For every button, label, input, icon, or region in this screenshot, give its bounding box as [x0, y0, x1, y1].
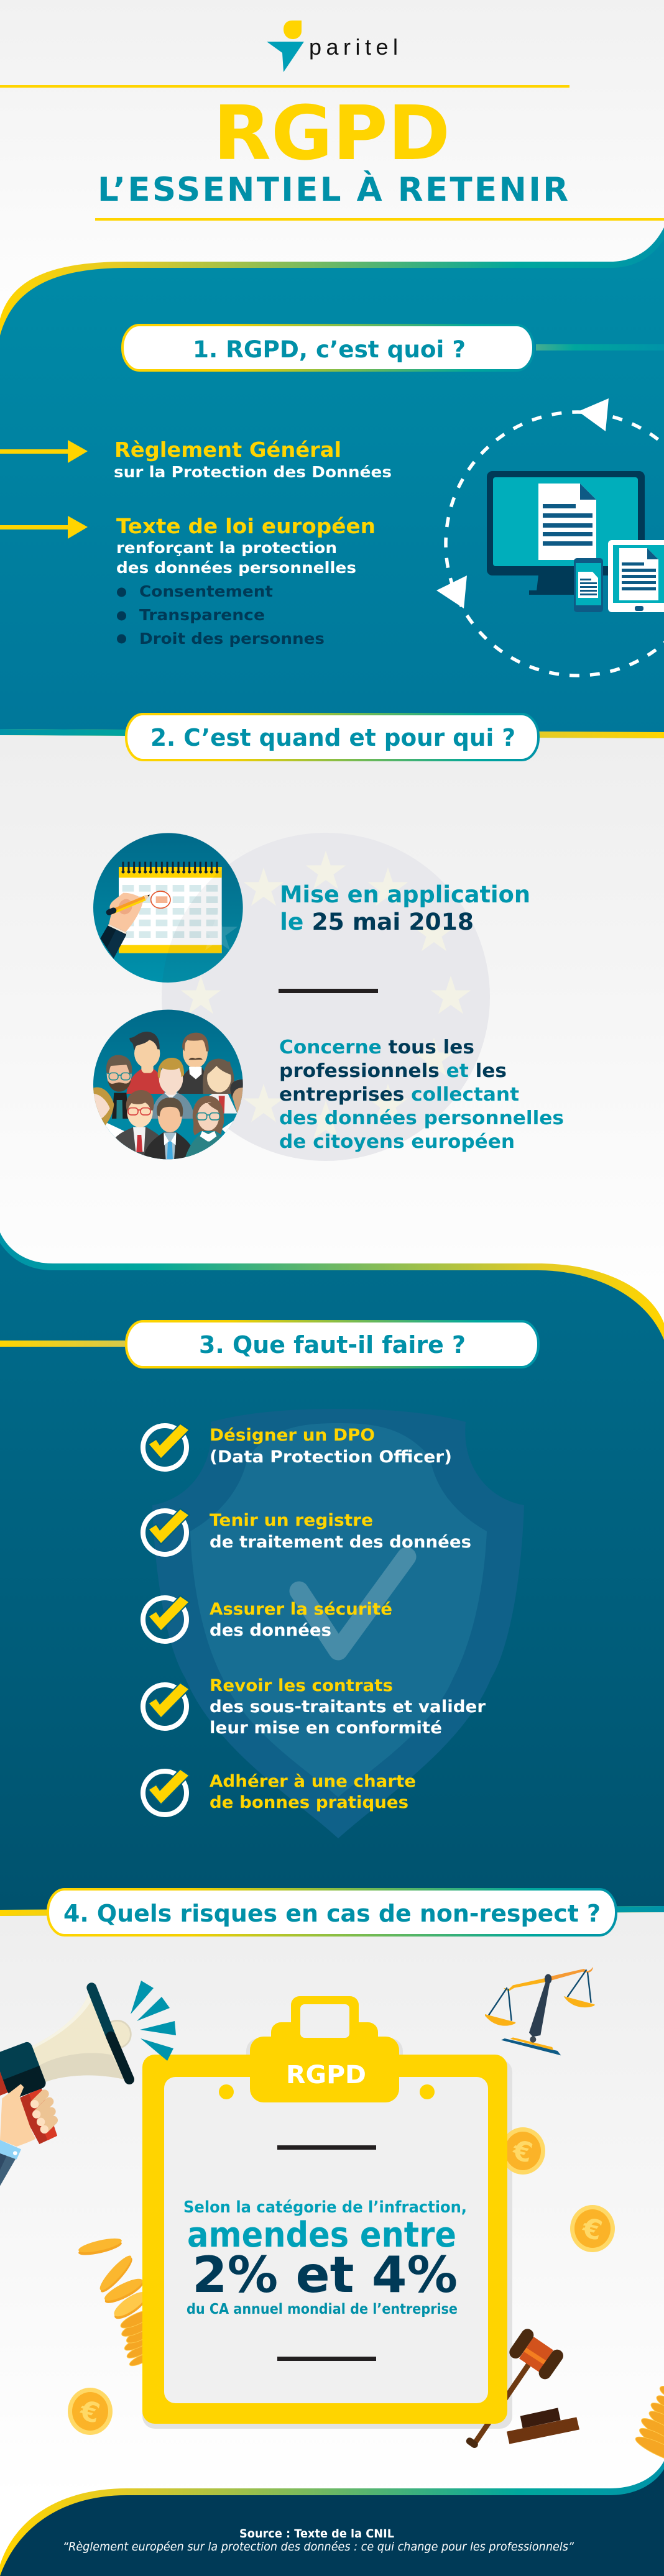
- title: RGPD: RGPD: [213, 91, 450, 177]
- checklist item: charte: Adhérer à une charte: [210, 1772, 416, 1791]
- heading 2 pill: [126, 714, 538, 760]
- text: concerne: professionnels et les: [279, 1060, 507, 1082]
- heading 1 pill: 1. RGPD, c’est quoi ?: [193, 336, 466, 363]
- checklist item: registre: de traitement des données: [210, 1533, 471, 1552]
- heading 3 pill: 3. Que faut-il faire ?: [199, 1331, 466, 1359]
- header rule bottom: [95, 218, 664, 221]
- text: Texte de loi européen: renforçant la protection: [116, 539, 337, 557]
- icon: monitor, tablet, phone with documents: [487, 471, 664, 612]
- subtitle: L’essentiel à retenir: L’ESSENTIEL À RETENIR: [98, 170, 568, 209]
- text: fine amounts: 2% et 4%: [192, 2246, 458, 2304]
- text: fine amounts: amendes entre: [187, 2215, 456, 2255]
- bullet list: Consentement: [139, 582, 273, 600]
- text: concerne: de citoyens européen: [279, 1131, 515, 1153]
- checklist item: registre: Tenir un registre: [210, 1511, 373, 1530]
- text: concerne: des données personnelles: [279, 1107, 564, 1129]
- heading 1 pill: [122, 325, 533, 370]
- footer source text: “Règlement européen sur la protection des données : ce qui change pour les professionnels”: [63, 2540, 574, 2554]
- checklist item: sécurité: des données: [210, 1621, 331, 1640]
- background: shield with check: [152, 1409, 524, 1838]
- megaphone sound rays: [131, 1981, 176, 2061]
- text: mise en application: Mise en application: [280, 881, 530, 908]
- panel 3: que faut-il faire: [0, 1232, 664, 1920]
- panel 2: background: [0, 729, 664, 1330]
- divider top: [277, 2145, 376, 2150]
- icon: calendar with hand: [93, 833, 243, 983]
- connector line left of heading 3: [0, 1341, 125, 1347]
- checklist item: DPO: Désigner un DPO: [210, 1426, 375, 1445]
- text: Texte de loi européen: Texte de loi européen: [116, 514, 376, 538]
- text: fine amounts: du CA annuel mondial de l’entreprise: [187, 2301, 458, 2317]
- footer source text: Source : Texte de la CNIL: [239, 2527, 394, 2541]
- checklist item: contrats: [143, 1676, 486, 1738]
- bullet list: Droit des personnes: [139, 630, 325, 648]
- text: Texte de loi européen: [116, 514, 376, 577]
- text: concerne: entreprises collectant: [279, 1084, 519, 1106]
- icon: group of people: [93, 1009, 243, 1160]
- text: mise en application: le 25 mai 2018: [280, 909, 474, 935]
- logo: paritel: [267, 21, 398, 72]
- arrow 1: [0, 440, 88, 463]
- footer panel: [0, 2461, 664, 2576]
- checklist item: contrats: Revoir les contrats: [210, 1676, 393, 1695]
- text: fine amounts: [183, 2198, 467, 2317]
- heading 4 pill: 4. Quels risques en cas de non-respect ?: [63, 1900, 601, 1927]
- text: concerne: Concerne tous les: [279, 1037, 474, 1058]
- person behind row: [126, 1069, 165, 1094]
- text: concerne: [279, 1037, 564, 1153]
- checklist item: contrats: des sous-traitants et valider: [210, 1697, 486, 1717]
- bullet list: [117, 582, 325, 648]
- panel 1: RGPD, c'est quoi: [0, 227, 664, 746]
- icon: gavel: [470, 2335, 579, 2444]
- icon: coins left stack: [77, 2235, 156, 2368]
- checklist item: sécurité: Assurer la sécurité: [210, 1600, 392, 1619]
- checklist item: registre: [143, 1510, 471, 1554]
- checklist item: charte: de bonnes pratiques: [210, 1793, 408, 1812]
- background: European Union circle with stars: [162, 833, 490, 1161]
- clipboard shadow: [142, 2038, 512, 2429]
- icon: euro coin right: [570, 2205, 615, 2252]
- arrow 2: [0, 516, 88, 539]
- checklist item: sécurité: [143, 1597, 392, 1641]
- icon: coin stack right: [633, 2384, 664, 2467]
- checklist item: charte: [143, 1770, 416, 1815]
- header rule top: [0, 85, 569, 88]
- icon: euro coin left: [68, 2388, 113, 2435]
- checklist item: contrats: leur mise en conformité: [210, 1718, 442, 1738]
- logo: paritel: paritel: [309, 34, 398, 60]
- panel 4: background: [0, 1906, 664, 2498]
- text: Règlement Général: sur la Protection des Données: [114, 463, 392, 481]
- icon: megaphone with hand: [0, 1987, 131, 2186]
- footer source text: [63, 2527, 574, 2554]
- clipboard: RGPD: [286, 2061, 366, 2089]
- divider: [279, 989, 378, 993]
- text: Texte de loi européen: des données personnelles: [116, 559, 356, 577]
- connector line right of heading 1: [536, 344, 664, 351]
- heading 3 pill: [126, 1321, 538, 1367]
- icon: scales: [485, 1967, 595, 2055]
- text: Règlement Général: [114, 438, 392, 481]
- icon: euro coin top right: [500, 2127, 545, 2175]
- text: mise en application: [280, 881, 530, 935]
- heading 2 pill: 2. C’est quand et pour qui ?: [150, 724, 515, 751]
- dashed cycle with arrowheads: [436, 398, 664, 676]
- checklist item: DPO: [143, 1424, 452, 1469]
- clipboard: [142, 1996, 507, 2424]
- divider bottom: [277, 2357, 376, 2361]
- checklist item: DPO: (Data Protection Officer): [210, 1447, 452, 1467]
- page background: header: [0, 0, 664, 348]
- heading 4 pill: [48, 1889, 616, 1935]
- text: fine amounts: Selon la catégorie de l’infraction,: [183, 2198, 467, 2217]
- text: Règlement Général: Règlement Général: [114, 438, 341, 462]
- bullet list: Transparence: [139, 606, 265, 624]
